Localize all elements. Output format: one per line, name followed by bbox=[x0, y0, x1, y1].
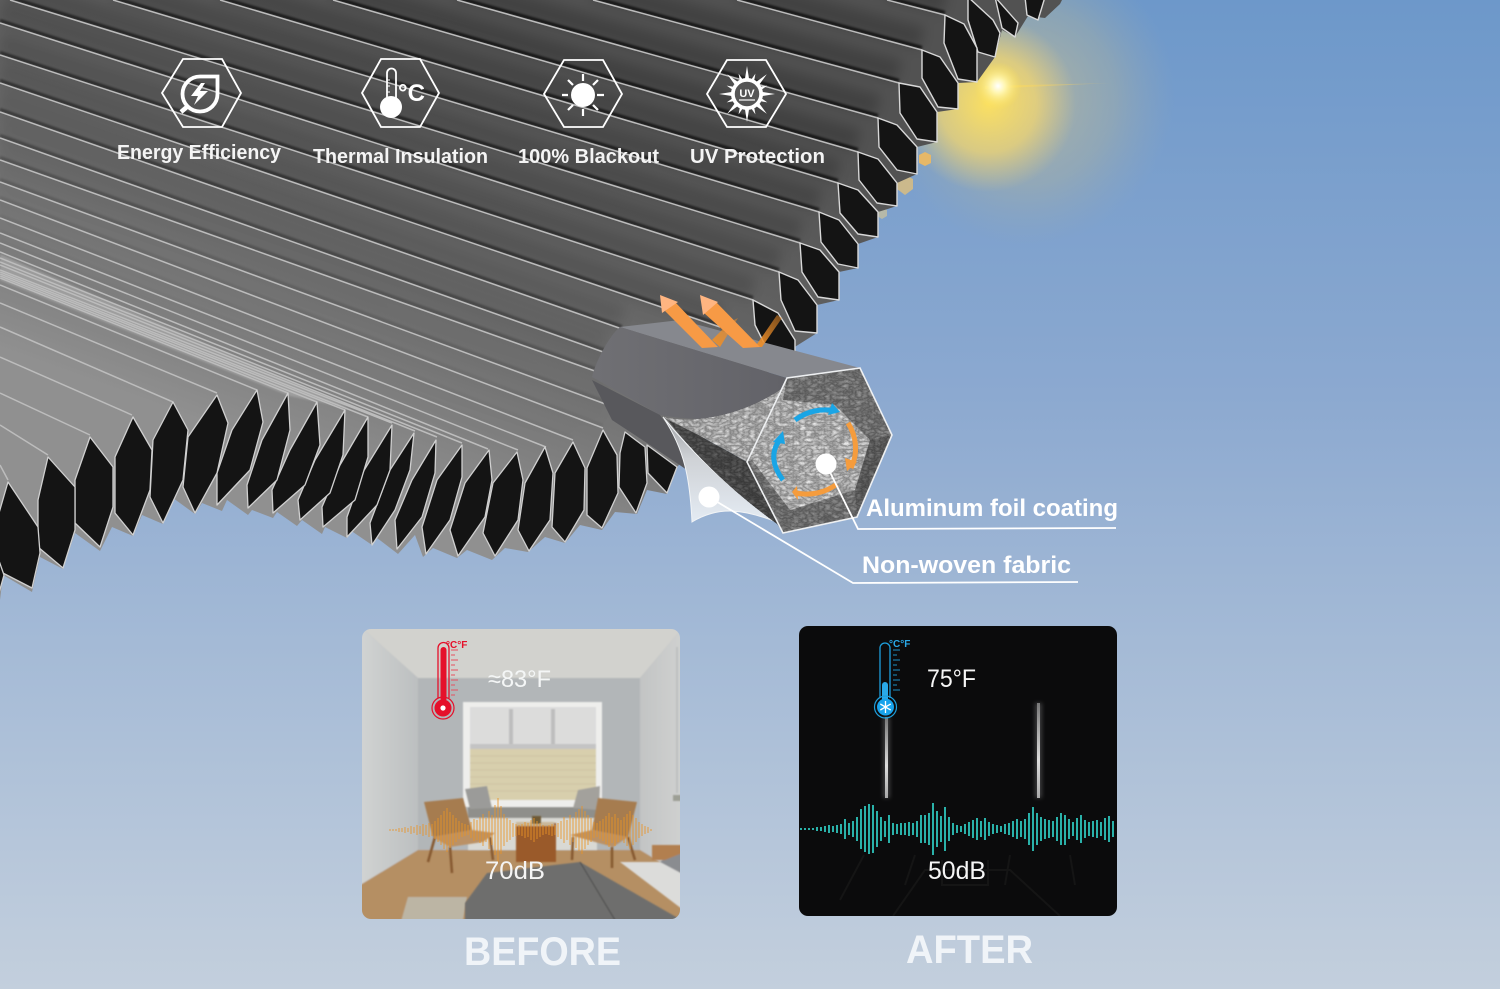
orange sound wave bbox=[390, 798, 651, 862]
label: Energy Efficiency bbox=[117, 142, 282, 164]
icon: blue thermometer with snowflake: °C°F bbox=[889, 639, 910, 650]
tube top face bbox=[620, 320, 860, 378]
pleat faces bbox=[0, 0, 1062, 600]
noise reading: 70dB bbox=[485, 857, 545, 885]
icon: UV sunburst: UV bbox=[739, 88, 755, 100]
bed and side furniture bbox=[465, 647, 690, 925]
cellular shade: pleated grey fabric bbox=[0, 0, 1062, 600]
window with cellular shade bbox=[463, 702, 602, 850]
feature: energy efficiency bbox=[117, 59, 282, 164]
heading: after: AFTER bbox=[906, 928, 1033, 972]
converging bright folds bbox=[0, 254, 350, 408]
icon: sun bbox=[544, 60, 622, 127]
orange reflected heat arrows bbox=[660, 295, 782, 348]
callout: aluminum foil coating bbox=[816, 454, 1118, 529]
light leaks at window edges bbox=[883, 703, 1042, 798]
feature: 100% blackout bbox=[518, 60, 659, 168]
foil interior walls bbox=[663, 385, 787, 533]
label: Thermal Insulation bbox=[313, 146, 488, 168]
air circulation arrows bbox=[773, 403, 857, 500]
tube lower face bbox=[592, 380, 687, 470]
callout: aluminum foil coating: Aluminum foil coating bbox=[866, 495, 1118, 522]
panel: before, bright room bbox=[362, 629, 680, 919]
faint furniture silhouettes bbox=[840, 855, 1075, 916]
cell cross-section: hexagonal tube bbox=[592, 320, 892, 533]
foil hexagon outline bbox=[747, 368, 892, 533]
noise reading: 50dB bbox=[928, 857, 986, 885]
dark cell openings, right edge bbox=[753, 0, 1045, 355]
feature: UV protection bbox=[690, 60, 825, 168]
foil hexagon opening bbox=[747, 368, 892, 533]
non-woven fabric layer bbox=[663, 417, 777, 522]
callout: non-woven fabric bbox=[698, 486, 1078, 583]
icon: red thermometer: °C°F bbox=[446, 640, 467, 651]
panel: after, blackout room bbox=[799, 626, 1117, 916]
icon: leaf with bolt bbox=[162, 59, 241, 127]
icon: blue thermometer with snowflake bbox=[874, 639, 910, 718]
pleat shading bbox=[0, 0, 945, 478]
icon: thermometer: °C bbox=[398, 80, 425, 107]
label: 100% Blackout bbox=[518, 146, 659, 168]
icon: thermometer bbox=[362, 59, 439, 127]
label: UV Protection bbox=[690, 146, 825, 168]
temperature reading: 75°F bbox=[927, 665, 976, 693]
room walls, ceiling and floor bbox=[362, 629, 680, 919]
dark room bbox=[799, 626, 1117, 916]
sun with lens flare bbox=[875, 0, 1175, 245]
dark cell openings, bottom edge bbox=[0, 390, 677, 600]
feature: thermal insulation bbox=[313, 59, 488, 168]
callout: non-woven fabric: Non-woven fabric bbox=[862, 552, 1071, 579]
pleat fold lines bbox=[0, 0, 945, 480]
heading: before: BEFORE bbox=[464, 930, 621, 974]
wicker chairs and table bbox=[424, 798, 637, 873]
teal sound wave bbox=[801, 803, 1113, 855]
temperature reading: ≈83°F bbox=[488, 666, 551, 693]
tube side face bbox=[592, 327, 787, 419]
icon: red thermometer bbox=[432, 640, 467, 719]
